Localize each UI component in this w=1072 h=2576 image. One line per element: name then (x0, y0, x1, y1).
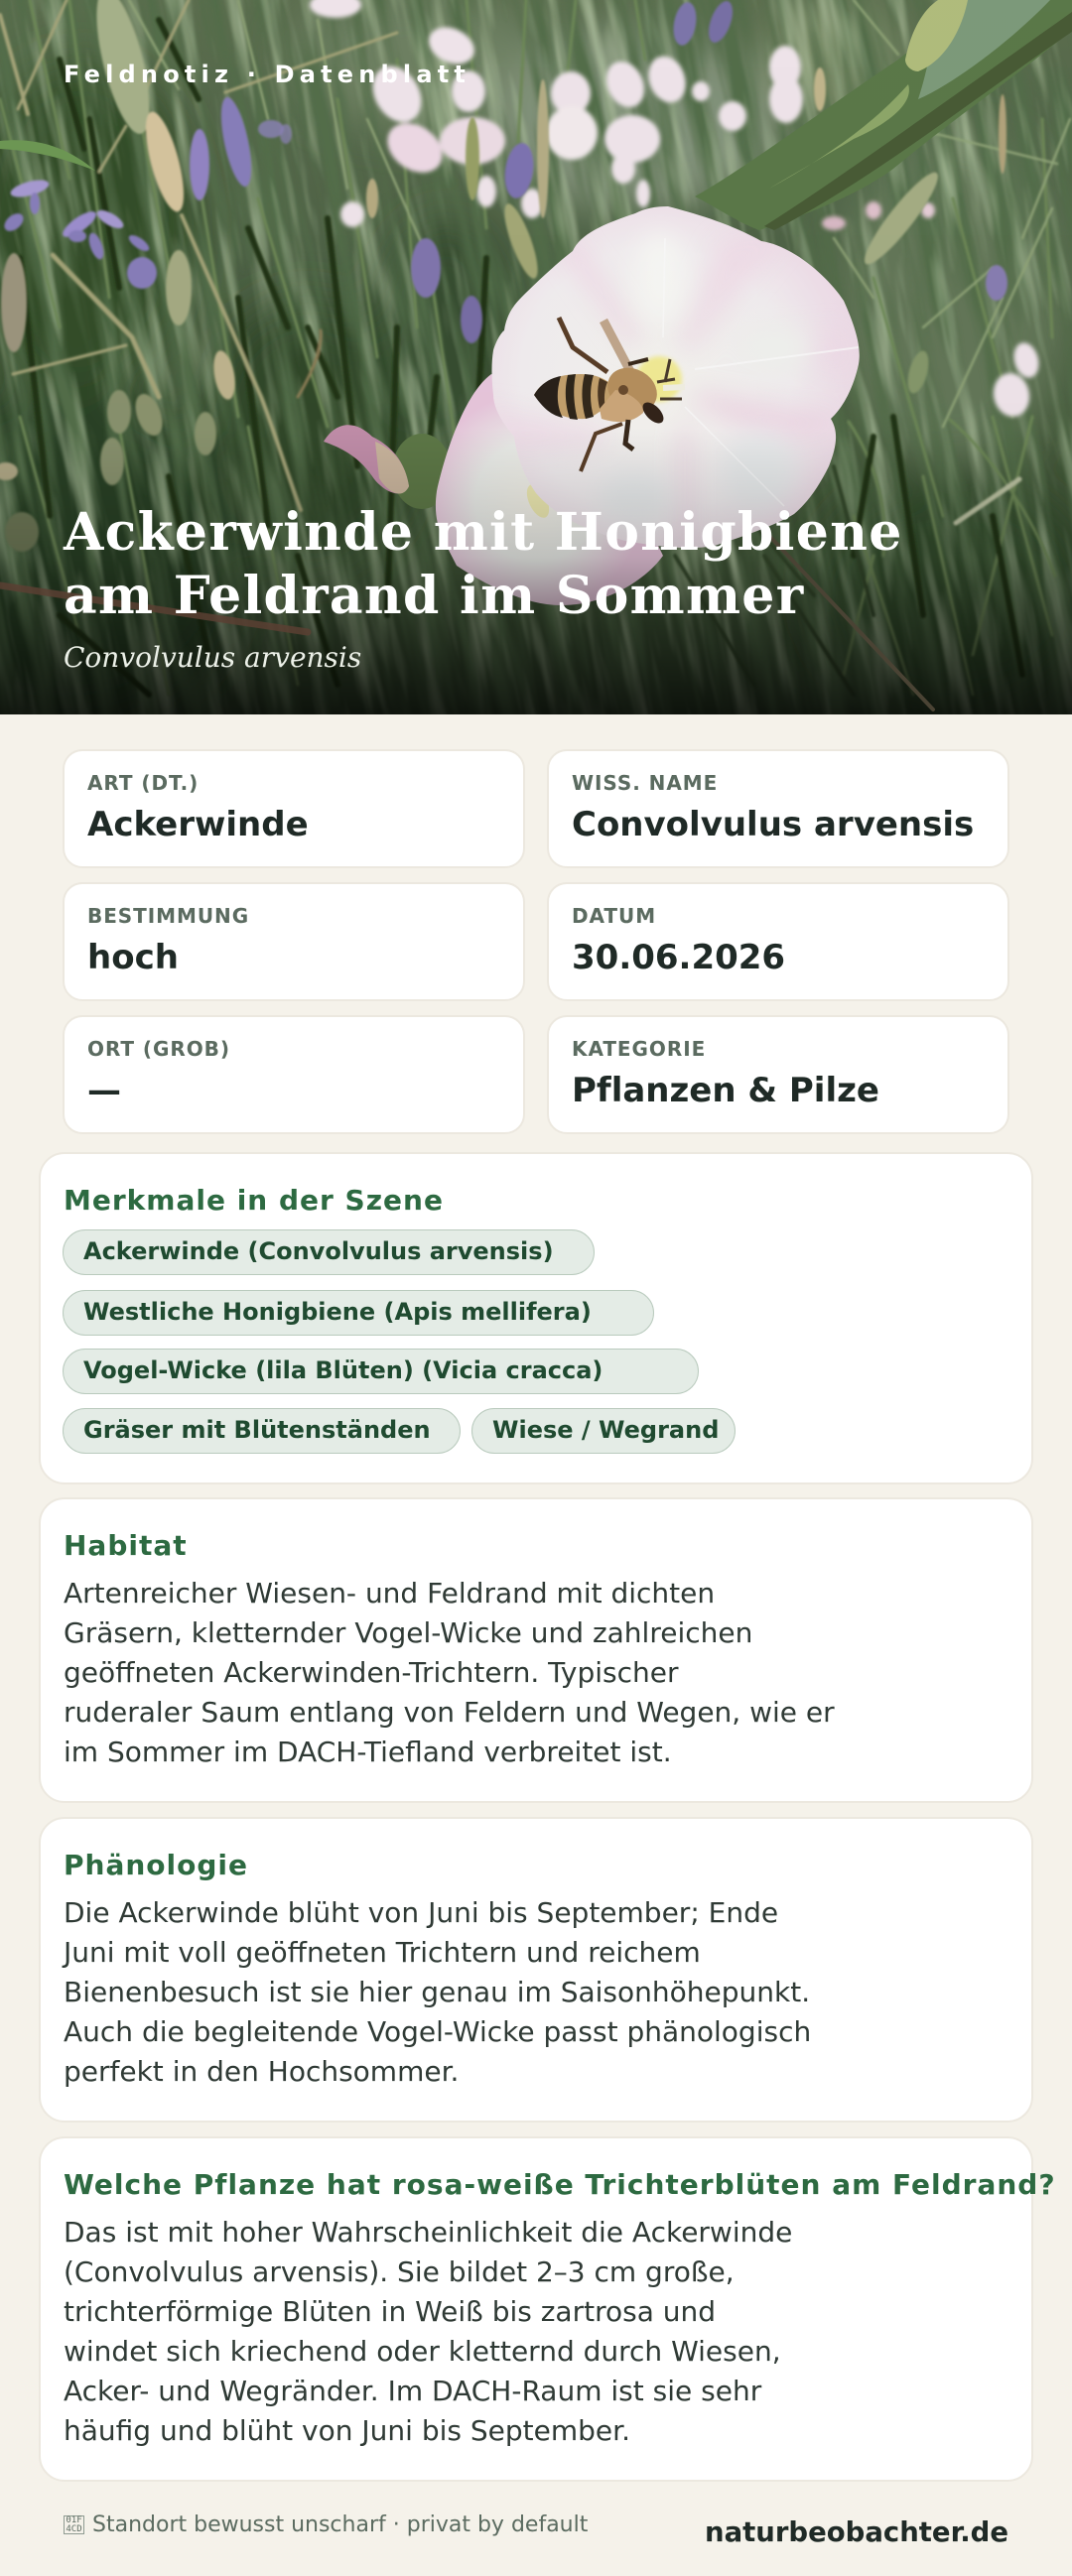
chip: Ackerwinde (63, 1229, 595, 1275)
fact card: Bestimmung: BESTIMMUNG (87, 904, 249, 928)
missing glyph box: 01F (66, 2515, 82, 2525)
fact card: Kategorie: KATEGORIE (572, 1037, 706, 1061)
text: FAQ: (Convolvulus arvensis). Sie bildet 2–3 cm große, (64, 2255, 735, 2288)
chip: Ackerwinde: Ackerwinde (Convolvulus arvensis) (83, 1237, 554, 1265)
hero subtitle: Convolvulus arvensis (64, 641, 361, 674)
left green leaf (0, 140, 95, 171)
main flower (492, 206, 860, 548)
footer note: Standort bewusst unscharf · privat by default (92, 2512, 588, 2537)
text: Phänologie: Auch die begleitende Vogel-Wicke passt phänologisch (64, 2015, 811, 2048)
fact card: Ort (63, 1015, 525, 1134)
heading: FAQ: Welche Pflanze hat rosa-weiße Trichterblüten am Feldrand? (64, 2168, 1056, 2201)
footer brand: naturbeobachter.de (705, 2516, 1008, 2548)
heading: Habitat: Habitat (64, 1529, 188, 1562)
heading: Merkmale: Merkmale in der Szene (64, 1184, 444, 1217)
top right leaf with bud (695, 0, 1072, 230)
seed heads (0, 0, 1006, 552)
fact card: Bestimmung: hoch (87, 938, 179, 977)
purple vetch flowers (1, 0, 1007, 343)
panel: Habitat (39, 1497, 1033, 1803)
text: FAQ: trichterförmige Blüten in Weiß bis zartrosa und (64, 2295, 716, 2328)
fact card: Datum: DATUM (572, 904, 656, 928)
text: FAQ: windet sich kriechend oder kletternd durch Wiesen, (64, 2335, 781, 2368)
overlay gradient (0, 0, 1072, 714)
eyebrow: Feldnotiz · Datenblatt (64, 61, 470, 88)
back flower (436, 374, 663, 605)
chip: Wiese (471, 1408, 736, 1454)
panel: Phänologie (39, 1817, 1033, 2123)
grass strokes (0, 0, 1070, 695)
missing glyph box (64, 2515, 84, 2534)
fact card: Wiss. Name: Convolvulus arvensis (572, 805, 974, 844)
fact card: Art: ART (DT.) (87, 771, 199, 795)
heading: Phänologie: Phänologie (64, 1849, 248, 1881)
grass texture (0, 0, 1072, 1043)
background flowers (310, 0, 1042, 420)
chip: Vogel-Wicke (63, 1349, 699, 1394)
hero title (64, 502, 903, 626)
text: FAQ: häufig und blüht von Juni bis September. (64, 2414, 630, 2447)
fact card: Datum (547, 882, 1009, 1001)
fact card: Wiss. Name: WISS. NAME (572, 771, 718, 795)
chip: Gräser (63, 1408, 461, 1454)
text: Phänologie: Bienenbesuch ist sie hier genau im Saisonhöhepunkt. (64, 1976, 810, 2008)
hero title: am Feldrand im Sommer (64, 566, 804, 626)
text: FAQ: Acker- und Wegränder. Im DACH-Raum ist sie sehr (64, 2375, 761, 2407)
text: Habitat: ruderaler Saum entlang von Feldern und Wegen, wie er (64, 1696, 835, 1729)
text: Habitat: Gräsern, kletternder Vogel-Wicke und zahlreichen (64, 1616, 752, 1649)
fact card: Ort: — (87, 1071, 121, 1110)
fact card: Bestimmung (63, 882, 525, 1001)
chip: Honigbiene (63, 1290, 654, 1336)
fact card: Kategorie (547, 1015, 1009, 1134)
dark stems (0, 536, 933, 709)
chip: Honigbiene: Westliche Honigbiene (Apis mellifera) (83, 1298, 592, 1326)
hero photo panel (0, 0, 1072, 714)
pink bud (324, 425, 452, 509)
text: Phänologie (62, 1896, 811, 2088)
text: FAQ: Das ist mit hoher Wahrscheinlichkeit die Ackerwinde (64, 2216, 792, 2249)
fact card: Datum: 30.06.2026 (572, 938, 785, 977)
text: FAQ (64, 2216, 792, 2447)
fact card: Art: Ackerwinde (87, 805, 309, 844)
panel: Merkmale in der Szene (39, 1152, 1033, 1484)
panel: FAQ (39, 2136, 1033, 2482)
text: Habitat: geöffneten Ackerwinden-Trichtern. Typischer (64, 1656, 679, 1689)
text: Phänologie: Juni mit voll geöffneten Trichtern und reichem (64, 1936, 701, 1969)
text: Habitat: im Sommer im DACH-Tiefland verbreitet ist. (64, 1736, 672, 1768)
missing glyph box: 4CD (66, 2524, 82, 2534)
fact card: Kategorie: Pflanzen & Pilze (572, 1071, 879, 1110)
chip: Vogel-Wicke: Vogel-Wicke (lila Blüten) (Vicia cracca) (83, 1356, 603, 1384)
hero title: Ackerwinde mit Honigbiene (64, 502, 903, 563)
chip: Wiese: Wiese / Wegrand (492, 1416, 719, 1444)
text: Habitat (64, 1577, 835, 1768)
chip: Gräser: Gräser mit Blütenständen (83, 1416, 431, 1444)
fact card: Ort: ORT (GROB) (87, 1037, 230, 1061)
text: Phänologie: perfekt in den Hochsommer. (64, 2055, 459, 2088)
fact card: Wiss. Name (547, 749, 1009, 868)
honey bee (534, 318, 685, 471)
fact card: Art (63, 749, 525, 868)
text: Habitat: Artenreicher Wiesen- und Feldrand mit dichten (64, 1577, 715, 1610)
text: Phänologie: Die Ackerwinde blüht von Juni bis September; Ende (64, 1896, 778, 1929)
